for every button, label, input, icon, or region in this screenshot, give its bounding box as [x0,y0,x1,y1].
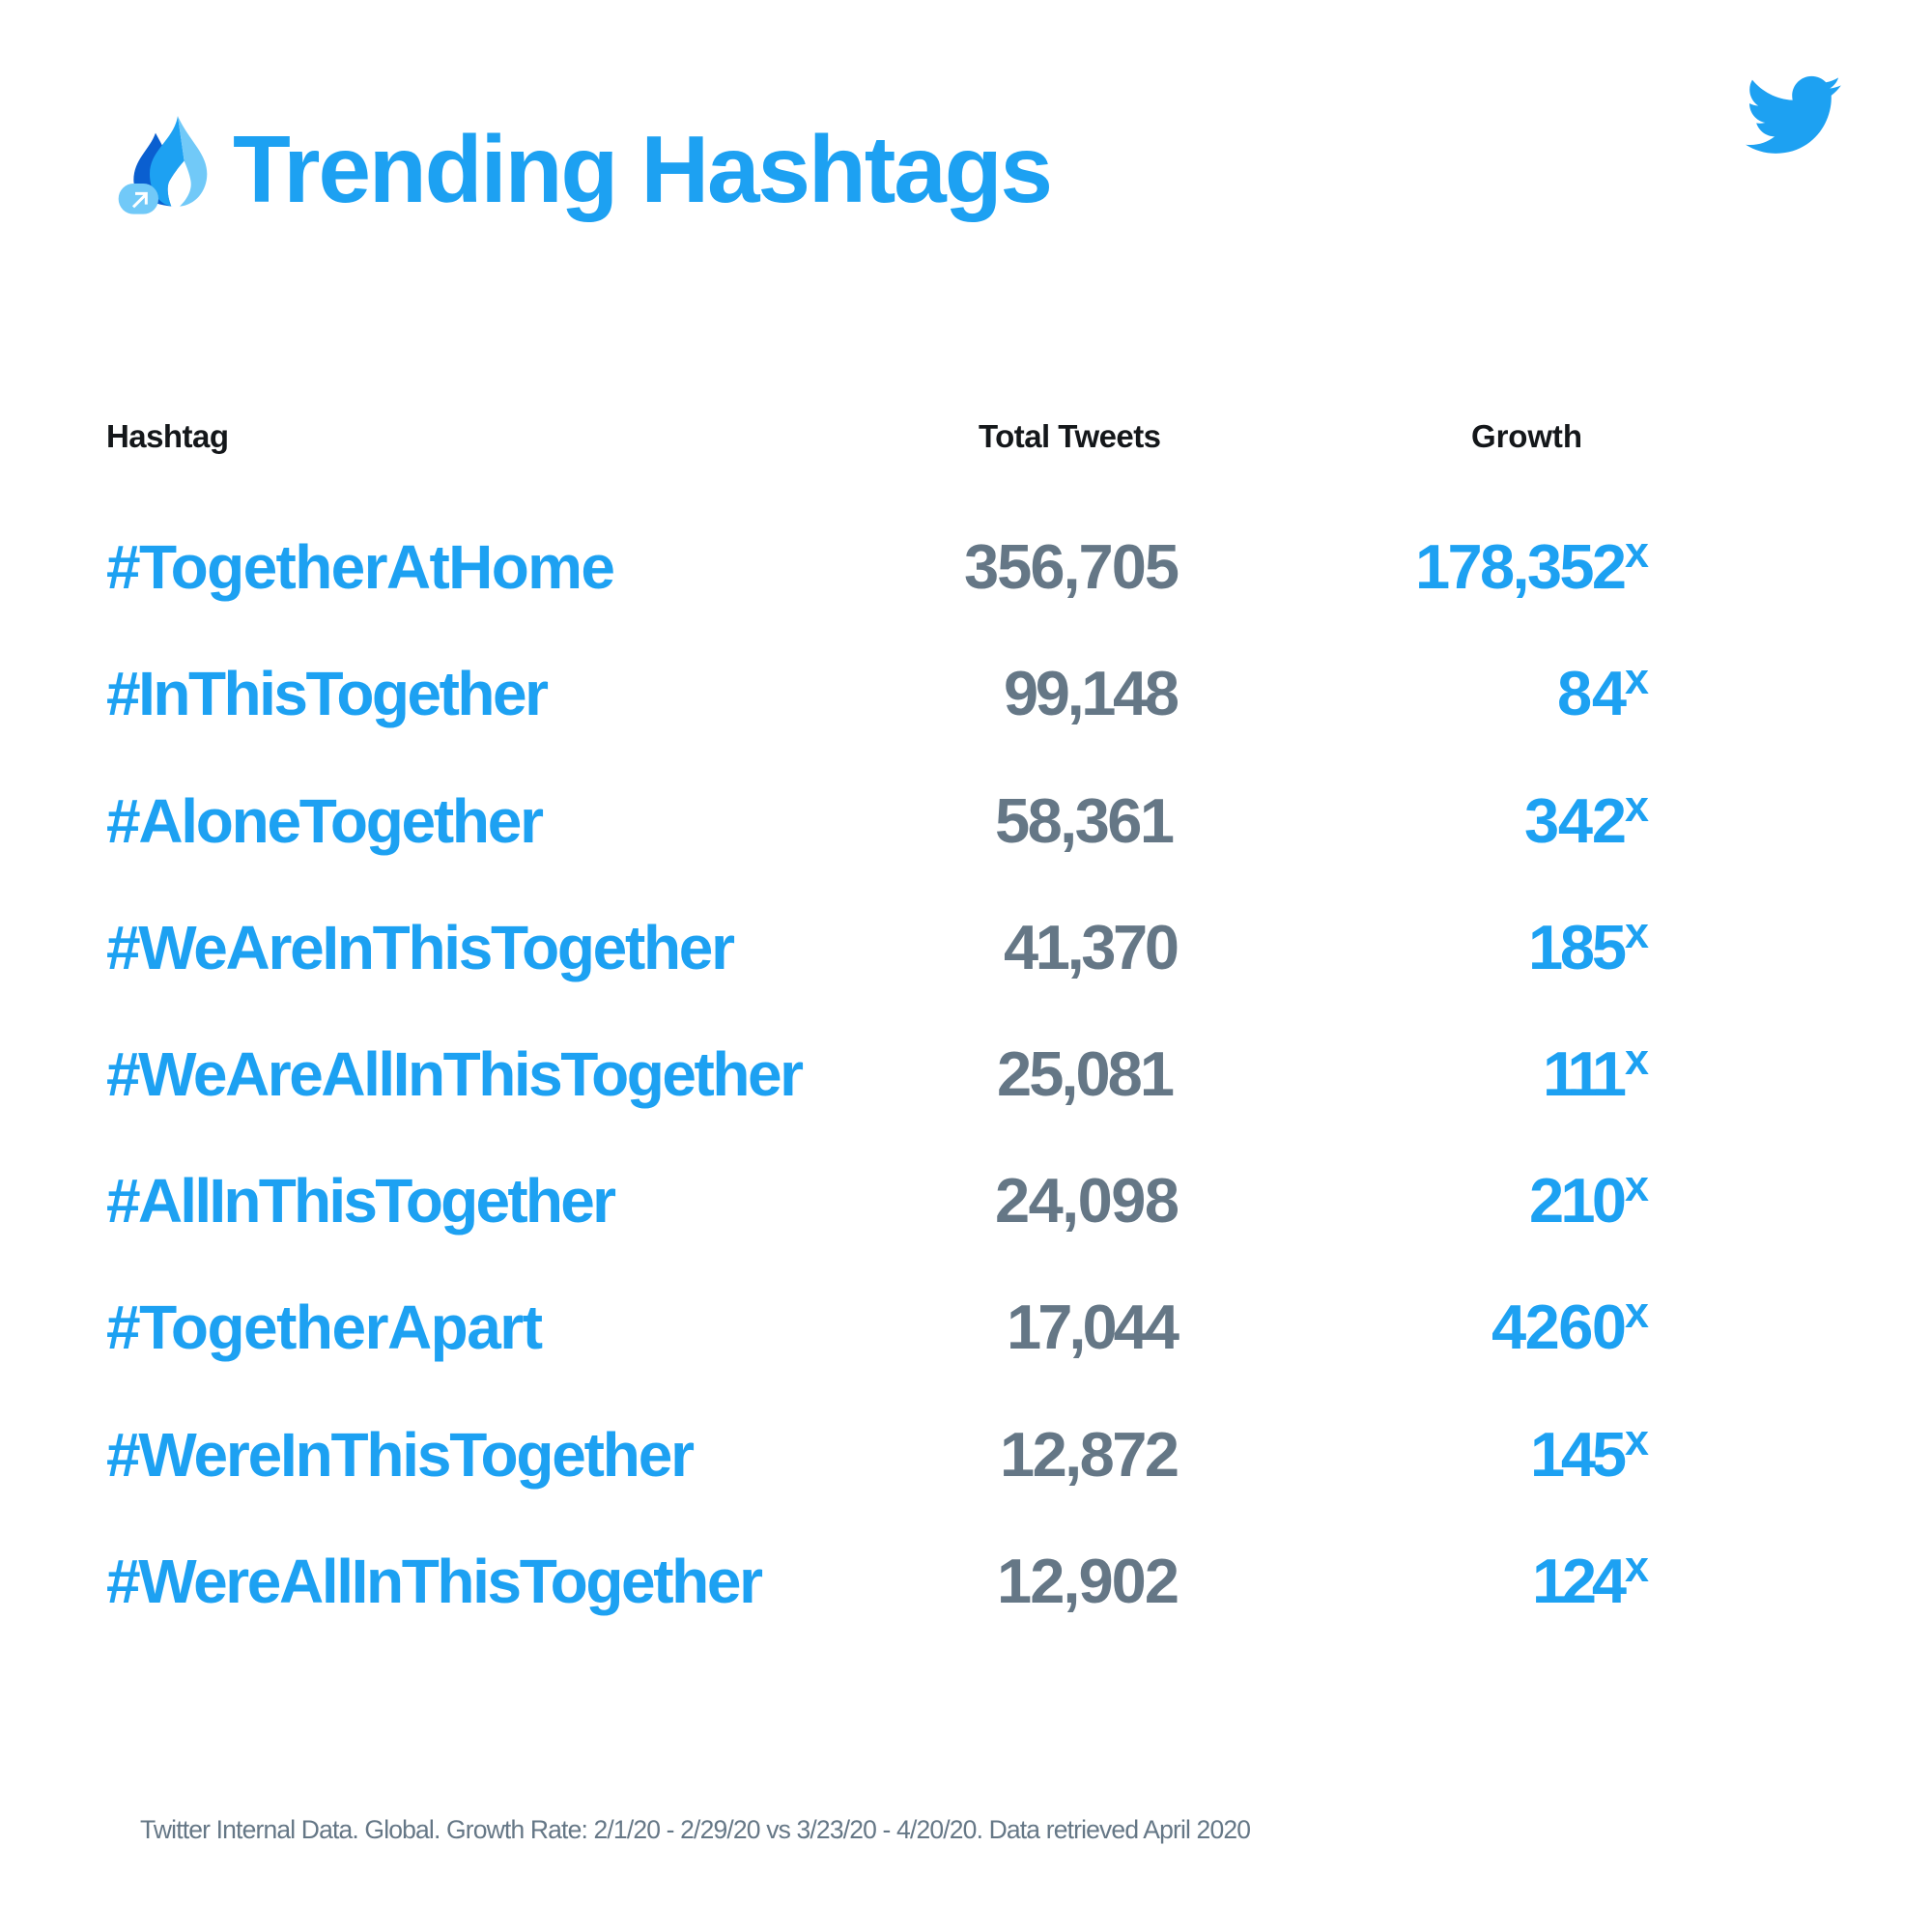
table header row [106,418,1582,454]
multiplier: x [1625,908,1649,957]
hashtag: #AloneTogether [106,786,544,856]
table row 3 [106,781,1649,856]
multiplier: x [1625,654,1649,703]
table row 8 [106,1415,1649,1490]
hashtag: #TogetherAtHome [106,532,615,602]
multiplier: x [1625,1035,1649,1084]
total tweets: 356,705 [964,531,1179,602]
hashtag: #WeAreInThisTogether [106,913,735,982]
hashtag: #WeAreAllInThisTogether [106,1039,804,1109]
multiplier: x [1625,1288,1649,1337]
total tweets: 12,902 [997,1546,1179,1616]
multiplier: x [1625,1161,1649,1210]
table row 1 [106,527,1649,602]
total tweets: 25,081 [997,1038,1175,1109]
table row 6 [106,1161,1649,1236]
total tweets: 12,872 [1000,1419,1179,1490]
growth value: 145 [1530,1419,1627,1490]
hashtag: #WereAllInThisTogether [106,1547,763,1616]
total tweets: 99,148 [1004,658,1179,728]
table row 5 [106,1035,1649,1109]
growth value: 342 [1524,785,1627,856]
icon: trending flame [119,116,207,214]
hashtag: #InThisTogether [106,659,549,728]
title: Trending Hashtags [233,116,1053,222]
column heading: hashtag: Hashtag [106,418,229,454]
total tweets: 17,044 [1007,1292,1179,1362]
multiplier: x [1625,1415,1649,1464]
hashtag: #AllInThisTogether [106,1166,616,1236]
table row 7 [106,1288,1649,1362]
icon: twitter bird [1746,76,1841,154]
multiplier: x [1625,781,1649,831]
multiplier: x [1625,527,1649,577]
table row 4 [106,908,1649,982]
growth value: 4260 [1492,1292,1627,1362]
growth value: 185 [1528,912,1627,982]
column heading: growth: Growth [1471,418,1582,454]
total tweets: 58,361 [995,785,1175,856]
growth value: 178,352 [1415,531,1627,602]
multiplier: x [1625,1542,1649,1591]
table row 9 [106,1542,1649,1616]
column heading: total tweets: Total Tweets [979,418,1161,454]
total tweets: 41,370 [1004,912,1179,982]
footnote: Twitter Internal Data. Global. Growth Rate: 2/1/20 - 2/29/20 vs 3/23/20 - 4/20/20. Data retrieved April 2020 [140,1815,1251,1844]
growth value: 84 [1557,658,1627,728]
growth value: 111 [1543,1038,1627,1109]
table row 2 [106,654,1649,728]
growth value: 210 [1529,1165,1627,1236]
growth value: 124 [1532,1546,1627,1616]
hashtag: #WereInThisTogether [106,1420,695,1490]
hashtag: #TogetherApart [106,1293,543,1362]
total tweets: 24,098 [995,1165,1179,1236]
